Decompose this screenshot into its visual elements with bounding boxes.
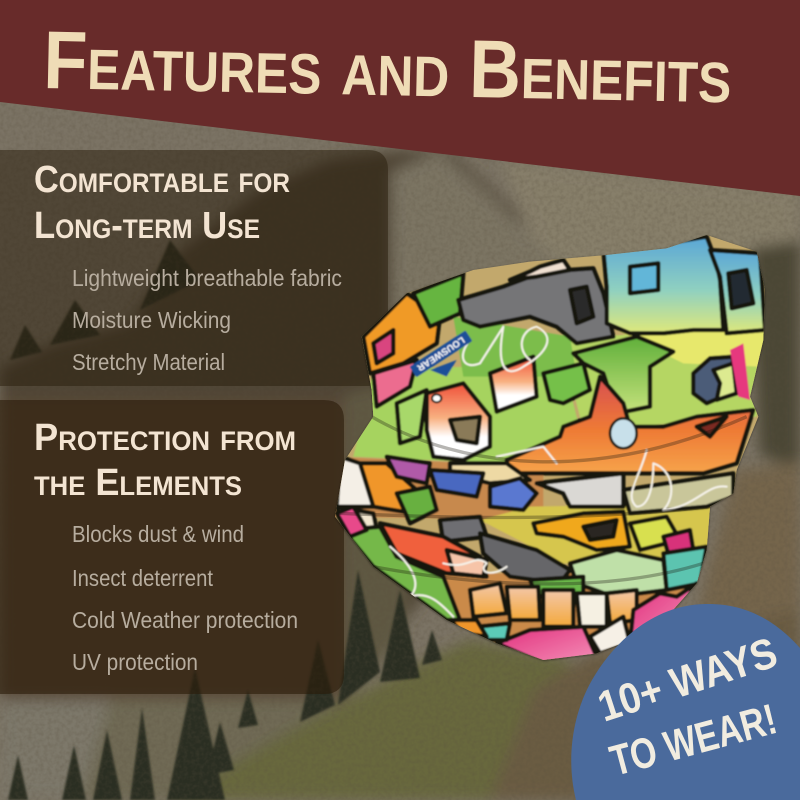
neck gaiter product image — [330, 230, 770, 663]
heading: comfortable: Comfortable for — [34, 159, 290, 201]
grey lower letters — [440, 517, 487, 542]
list: protection features: Insect deterrent — [72, 565, 214, 591]
list: protection features — [72, 521, 298, 675]
panel: protection from the elements — [0, 400, 344, 694]
list: protection features: UV protection — [72, 649, 198, 675]
tree line — [8, 240, 442, 800]
yellow letters — [533, 512, 630, 550]
grey-white letter and yellow-green — [537, 473, 623, 507]
panel: comfortable for long-term use — [0, 150, 388, 386]
red-orange letters — [507, 377, 753, 473]
pink letters — [630, 583, 697, 643]
list: comfort features — [72, 265, 342, 375]
logo tag: LOUSWEAR — [415, 335, 466, 373]
orange-letter highlights — [610, 418, 637, 448]
panel: comfortable for long-term use: Long-term Use — [34, 205, 260, 247]
list: comfort features: Lightweight breathable fabric — [72, 265, 342, 291]
top-left orange and green letters — [363, 293, 440, 373]
white script lettering — [390, 327, 727, 617]
green letter — [573, 337, 673, 413]
crescent field — [693, 357, 733, 403]
list: protection features: Blocks dust & wind — [72, 521, 244, 547]
list: protection features: Cold Weather protection — [72, 607, 298, 633]
tan fold — [450, 463, 530, 483]
pink splash — [730, 343, 750, 400]
colourful fold left — [360, 463, 417, 513]
callout: 10+ ways to wear — [571, 604, 800, 800]
grey letters — [458, 268, 613, 343]
list: comfort features: Moisture Wicking — [72, 307, 231, 333]
underlay colour fields — [570, 334, 764, 426]
teal and striped blocks — [570, 550, 667, 597]
panel: protection from the elements: the Elements — [34, 462, 242, 504]
list: comfort features: Stretchy Material — [72, 349, 225, 375]
header banner — [0, 0, 800, 196]
callout text: 10+ WAYS — [592, 629, 783, 732]
green and white script block — [343, 527, 460, 620]
logo tag — [410, 330, 472, 377]
blue-yellow letters — [603, 237, 723, 333]
heading: protection: Protection from — [34, 417, 296, 459]
fabric fold shading — [337, 417, 747, 584]
peach column letters — [470, 583, 507, 617]
white-orange letters — [490, 357, 537, 412]
